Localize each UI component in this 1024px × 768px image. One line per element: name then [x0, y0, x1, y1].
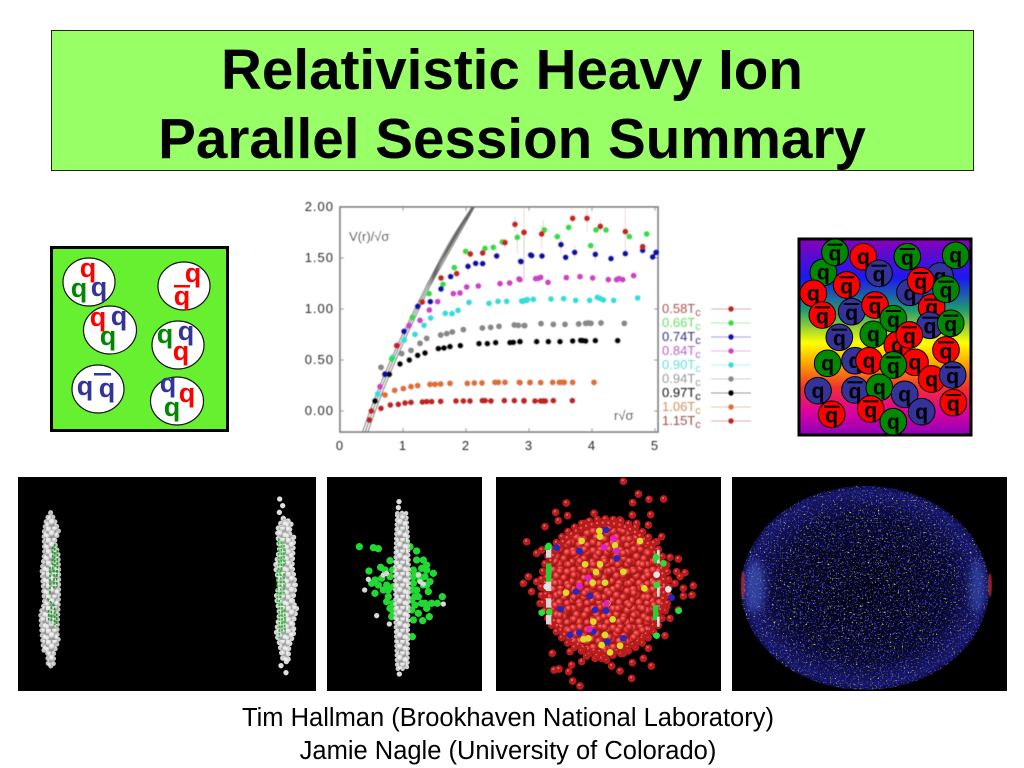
panel: quark-gluon plasma with rainbow background: q [925, 296, 938, 320]
chart legend: c [695, 335, 701, 347]
panel: quark-gluon plasma with rainbow background: q [867, 323, 880, 347]
panel: hadrons - quarks confined in baryons and mesons: q [99, 373, 115, 403]
panel: hadrons - quarks confined in baryons and mesons: q [80, 253, 96, 283]
title: Relativistic Heavy Ion [221, 38, 803, 101]
chart legend: 0.90T [662, 357, 695, 372]
panel: quark-gluon plasma with rainbow background: q [828, 242, 842, 266]
panel: quark-gluon plasma with rainbow background: q [908, 351, 922, 375]
chart legend: c [695, 307, 701, 319]
panel: quark-gluon plasma with rainbow background: q [944, 313, 957, 337]
chart legend: 0.74T [662, 329, 695, 344]
chart axes: 5 [651, 438, 659, 453]
panel: hadrons - quarks confined in baryons and mesons: q [173, 336, 189, 366]
panel: hadrons - quarks confined in baryons and mesons: q [157, 319, 173, 349]
chart legend: c [695, 363, 701, 375]
panel: quark-gluon plasma with rainbow background: q [848, 379, 862, 403]
panel: quark-gluon plasma with rainbow background: q [845, 301, 858, 325]
chart axes: 0.00 [305, 403, 334, 418]
panel: quark-gluon plasma with rainbow background: q [868, 294, 882, 318]
chart axes: 2 [462, 438, 470, 453]
chart axes: 1 [399, 438, 407, 453]
panel: quark-gluon plasma with rainbow background: q [840, 274, 853, 298]
panel: quark-gluon plasma with rainbow background: q [857, 245, 870, 269]
panel: quark-gluon plasma with rainbow background: q [933, 264, 947, 288]
chart axes: 1.00 [305, 301, 334, 316]
chart axes: V(r)/√σ [349, 229, 389, 244]
panel: quark-gluon plasma with rainbow background: q [898, 383, 911, 407]
panel: quark-gluon plasma with rainbow background: q [923, 315, 937, 339]
credits [242, 704, 774, 765]
panel: quark-gluon plasma with rainbow background: q [939, 279, 953, 303]
panel: quark-gluon plasma with rainbow background: q [939, 339, 953, 363]
chart axes: 3 [525, 438, 533, 453]
panel: quark-gluon plasma with rainbow background: q [872, 263, 886, 287]
chart legend: 0.66T [662, 315, 695, 330]
panel: hadrons - quarks confined in baryons and mesons: q [174, 281, 190, 311]
chart legend: c [695, 391, 701, 403]
chart axes: r√σ [614, 408, 634, 423]
chart legend: 0.94T [662, 371, 695, 386]
panel: quark-gluon plasma with rainbow background: q [864, 398, 877, 422]
panel: quark-gluon plasma with rainbow background: q [903, 324, 916, 348]
chart legend: c [695, 321, 701, 333]
credits: Jamie Nagle (University of Colorado) [300, 737, 716, 765]
chart axes: 2.00 [305, 199, 334, 214]
panel: hadrons - quarks confined in baryons and mesons: q [164, 392, 180, 422]
panel: quark-gluon plasma with rainbow background: q [901, 246, 914, 270]
panel: quark-gluon plasma with rainbow background: q [817, 261, 830, 285]
panel: quark-gluon plasma with rainbow background: q [821, 352, 834, 376]
credits: Tim Hallman (Brookhaven National Laboratory) [242, 704, 774, 732]
panel: quark-gluon plasma with rainbow background: q [825, 404, 838, 428]
chart legend: 1.06T [662, 399, 695, 414]
panel: quark-gluon plasma with rainbow background: q [833, 327, 846, 351]
panel: hadrons - quarks confined in baryons and mesons: q [160, 368, 176, 398]
image: expanding fireball of red hadrons [496, 477, 721, 691]
panel: hadrons - quarks confined in baryons and mesons: q [179, 378, 195, 408]
panel: quark-gluon plasma with rainbow background: q [887, 354, 900, 378]
chart legend: 0.58T [662, 301, 695, 316]
chart legend: 1.15T [662, 413, 695, 428]
title: Parallel Session Summary [158, 107, 866, 170]
chart axes: 4 [588, 438, 596, 453]
title [52, 30, 974, 170]
panel: quark-gluon plasma with rainbow background: q [862, 349, 876, 373]
panel: quark-gluon plasma with rainbow background [799, 239, 971, 435]
panel: hadrons - quarks confined in baryons and mesons: q [185, 258, 201, 288]
image: nuclei at moment of collision [327, 477, 482, 691]
panel: hadrons - quarks confined in baryons and mesons: q [91, 272, 107, 302]
panel: quark-gluon plasma with rainbow background: q [816, 304, 829, 328]
chart legend: c [695, 405, 701, 417]
chart legend: c [695, 349, 701, 361]
panel: hadrons - quarks confined in baryons and mesons: q [77, 371, 93, 401]
panel: quark-gluon plasma with rainbow background: q [949, 244, 962, 268]
left nucleus [41, 513, 59, 666]
panel: hadrons - quarks confined in baryons and mesons: q [100, 321, 116, 351]
image: dense cloud of final-state particles [732, 477, 1007, 691]
panel: quark-gluon plasma with rainbow background: q [887, 410, 900, 434]
panel: quark-gluon plasma with rainbow background: q [903, 282, 917, 306]
panel: quark-gluon plasma with rainbow background: q [811, 379, 825, 403]
chart legend: c [695, 377, 701, 389]
panel: quark-gluon plasma with rainbow background: q [848, 349, 862, 373]
chart axes [305, 199, 659, 453]
chart axes: 0 [336, 438, 344, 453]
panel: quark-gluon plasma with rainbow background: q [807, 282, 820, 306]
panel: hadrons - quarks confined in baryons and mesons: q [178, 316, 194, 346]
image: two colliding nuclei approaching [18, 477, 316, 691]
chart legend [662, 301, 751, 431]
panel: hadrons - quarks confined in baryons and mesons [52, 248, 228, 430]
panel: hadrons - quarks confined in baryons and mesons: q [90, 302, 106, 332]
panel: hadrons - quarks confined in baryons and mesons: q [71, 273, 87, 303]
panel: hadrons - quarks confined in baryons and mesons: q [111, 301, 127, 331]
chart axes: 0.50 [305, 352, 334, 367]
chart legend: 0.84T [662, 343, 695, 358]
panel: quark-gluon plasma with rainbow background: q [915, 400, 928, 424]
panel: quark-gluon plasma with rainbow background: q [946, 364, 959, 388]
panel: quark-gluon plasma with rainbow background: q [925, 367, 938, 391]
chart legend: 0.97T [662, 385, 695, 400]
chart data points [363, 207, 656, 432]
panel: quark-gluon plasma with rainbow background: q [887, 308, 900, 332]
chart: potential V(r) versus r at several temperatures [305, 199, 751, 453]
right nucleus [275, 499, 297, 673]
chart legend: c [695, 419, 701, 431]
panel: quark-gluon plasma with rainbow background: q [891, 333, 904, 357]
chart axes: 1.50 [305, 250, 334, 265]
panel: quark-gluon plasma with rainbow background: q [873, 376, 886, 400]
panel: quark-gluon plasma with rainbow background: q [914, 270, 927, 294]
panel: quark-gluon plasma with rainbow background: q [947, 392, 960, 416]
